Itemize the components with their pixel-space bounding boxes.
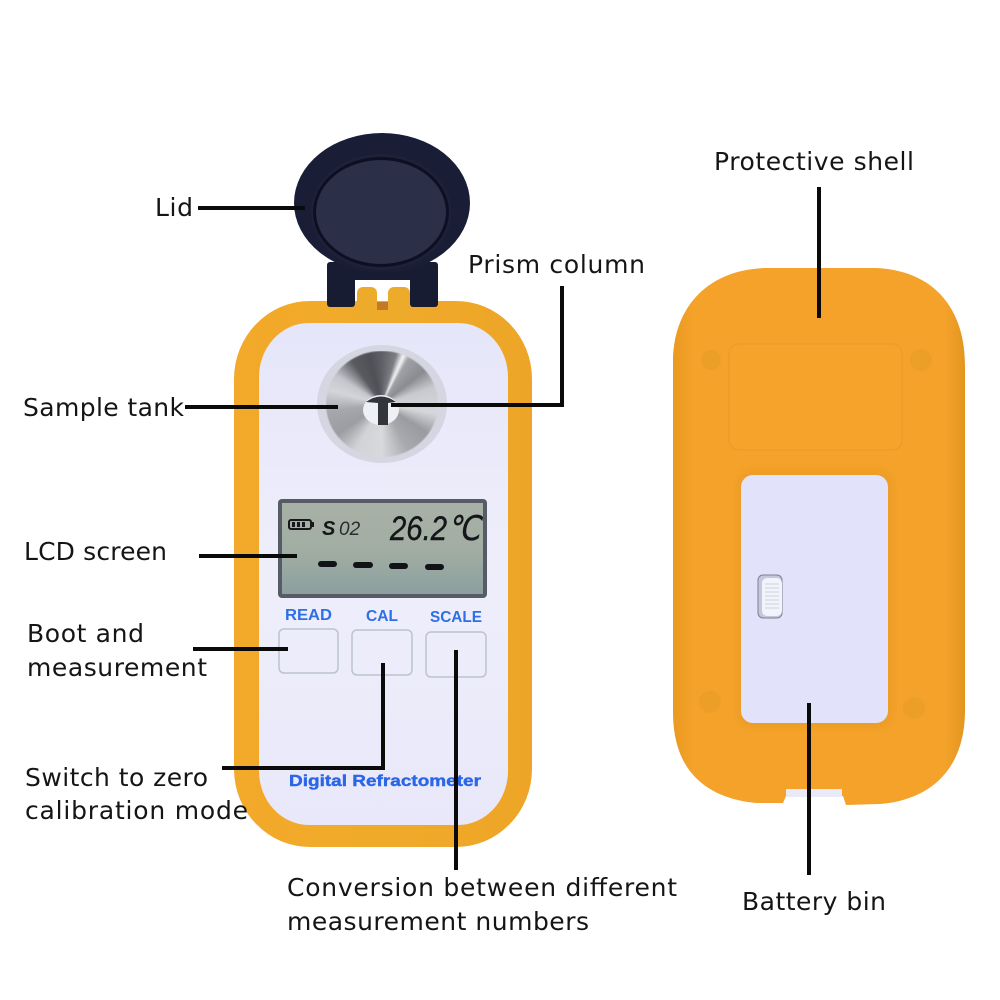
button: SCALE: SCALE: [430, 609, 482, 626]
button: CAL: CAL: [366, 608, 398, 625]
icon: hinge tabs: [357, 287, 410, 322]
LCD screen: [278, 499, 487, 598]
temperature readout: 26.2℃: [389, 510, 483, 548]
leader: lid: [198, 206, 305, 210]
icon: sample tank metal disc: [317, 345, 447, 463]
bottom notch: [786, 789, 842, 797]
icon: lid: [294, 133, 470, 307]
label: boot and measurement: measurement: [27, 653, 207, 682]
label: sample tank: Sample tank: [23, 393, 185, 422]
label: battery bin: Battery bin: [742, 887, 886, 916]
recessed label area: [729, 344, 902, 450]
label: conversion between measurement numbers: measurement numbers: [287, 907, 589, 936]
icon: battery: [289, 520, 314, 529]
label: switch to zero calibration mode: calibration mode: [25, 796, 248, 825]
mode readout: S: [322, 518, 336, 540]
shell body: [673, 268, 965, 805]
leader: boot and measurement: [193, 647, 288, 651]
measurement dashes: [318, 561, 444, 570]
yellow rubber frame: [234, 301, 532, 847]
button: CAL: [352, 608, 412, 675]
button: READ: [279, 607, 338, 673]
label: LCD screen: LCD screen: [24, 537, 167, 566]
leader: battery bin: [807, 703, 811, 875]
prism column: [363, 395, 399, 425]
battery bin door: [736, 469, 894, 729]
leader: zero calibration: [222, 663, 383, 768]
label: switch to zero calibration mode: Switch to zero: [25, 763, 208, 792]
device name: Digital Refractometer: [289, 773, 481, 790]
front device: digital refractometer: [234, 133, 532, 847]
bumps: [699, 349, 932, 719]
label: conversion between measurement numbers: Conversion between different: [287, 873, 677, 902]
leader: LCD screen: [199, 554, 297, 558]
leader lines: [185, 187, 819, 875]
leader: conversion: [454, 650, 458, 870]
label: protective shell: Protective shell: [714, 147, 914, 176]
back device: protective shell: [673, 268, 965, 805]
mode readout: 02: [339, 519, 361, 540]
leader: protective shell: [817, 187, 821, 318]
label: prism column: Prism column: [468, 250, 645, 279]
leader: sample tank: [185, 405, 338, 409]
button: READ: READ: [285, 607, 332, 624]
leader: prism column: [391, 286, 562, 405]
label: boot and measurement: Boot and: [27, 619, 144, 648]
latch: [758, 575, 782, 618]
button: SCALE: [426, 609, 486, 677]
mode readout: [322, 518, 361, 540]
white face plate: [259, 323, 508, 825]
label: lid: Lid: [155, 193, 193, 222]
